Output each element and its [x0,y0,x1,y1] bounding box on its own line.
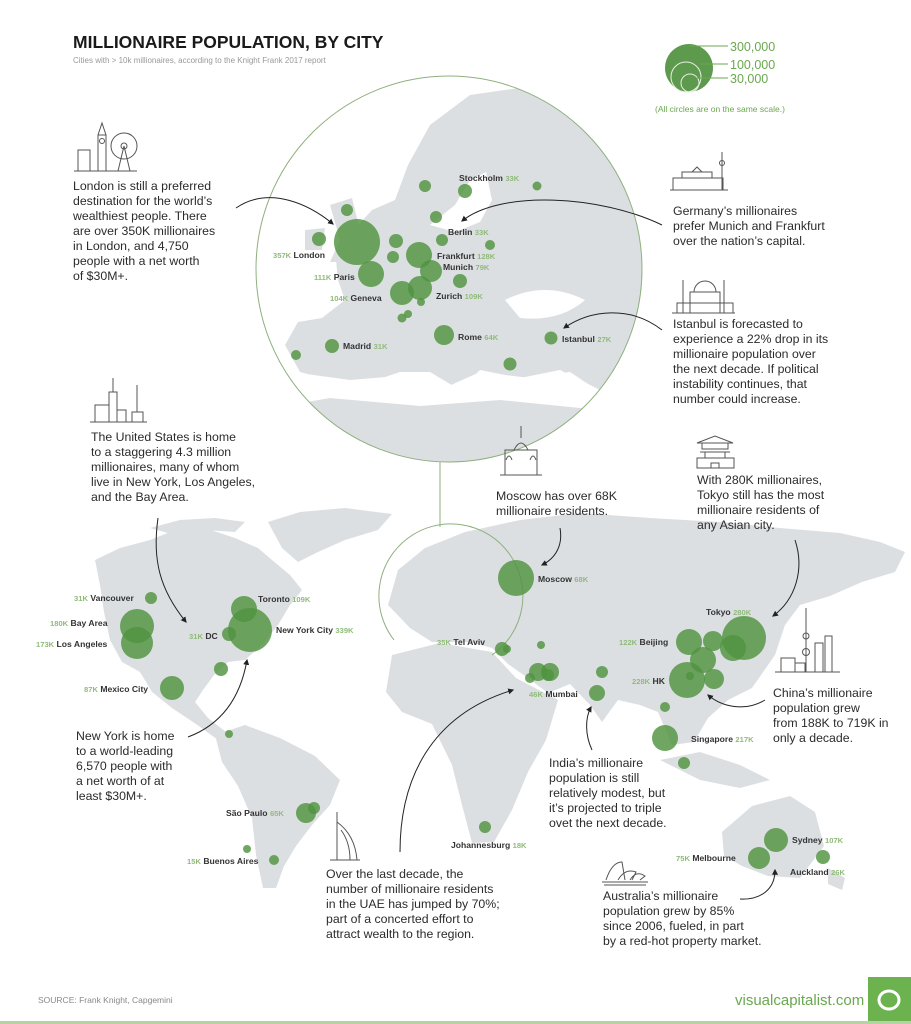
legend: 100,000 [730,58,775,72]
text: australia: population grew by 85% [603,904,734,918]
europe labels: Frankfurt 128K [437,251,496,261]
europe labels: Istanbul 27K [562,334,612,344]
text: london: people with a net worth [73,254,200,268]
icon: moscow [500,426,542,475]
world labels: Auckland 26K [790,867,846,877]
icon: new york [90,378,147,422]
europe labels: Munich 79K [443,262,490,272]
icon: berlin [670,152,728,190]
world labels: 75K Melbourne [676,853,736,863]
world bubbles [120,560,830,869]
europe bubbles [291,180,558,370]
text: australia: Australia’s millionaire [603,889,718,903]
connector line to moscow circle [439,462,441,527]
text: new york: a net worth of at [76,774,165,788]
world labels: Moscow 68K [538,574,589,584]
text: london: of $30M+. [73,269,128,283]
text: new york: least $30M+. [76,789,147,803]
legend: (All circles are on the same scale.) [655,104,785,114]
text: australia: by a red-hot property market. [603,934,762,948]
world labels: Sydney 107K [792,835,844,845]
text: india: it’s projected to triple [549,801,662,815]
icon: burj al arab [330,812,360,860]
icon: sydney opera [602,862,648,885]
text: india: population is still [549,771,639,785]
footer: SOURCE: Frank Knight, Capgemini [38,995,173,1005]
text: united states: millionaires, many of whom [91,460,239,474]
world labels: 173K Los Angeles [36,639,108,649]
text: istanbul: experience a 22% drop in its [673,332,828,346]
text: tokyo: millionaire residents of [697,503,820,517]
text: tokyo: Tokyo still has the most [697,488,825,502]
footer [0,977,911,1024]
world labels: Johannesburg 18K [451,840,527,850]
world labels: 46K Mumbai [529,689,578,699]
legend [655,40,785,114]
legend: 300,000 [730,40,775,54]
text: germany: Germany’s millionaires [673,204,797,218]
text: uae: number of millionaire residents [326,882,493,896]
text: india: relatively modest, but [549,786,666,800]
europe labels: 104K Geneva [330,293,382,303]
text: istanbul: Istanbul is forecasted to [673,317,803,331]
text: tokyo: With 280K millionaires, [697,473,822,487]
europe labels: Zurich 109K [436,291,483,301]
text: london: are over 350K millionaires [73,224,215,238]
legend: 30,000 [730,72,768,86]
text: united states: and the Bay Area. [91,490,189,504]
world labels: São Paulo 65K [226,808,284,818]
world labels: 35K Tel Aviv [437,637,485,647]
text: tokyo: any Asian city. [697,518,775,532]
europe labels [273,173,612,351]
text: australia: since 2006, fueled, in part [603,919,744,933]
europe labels: Madrid 31K [343,341,388,351]
world map land [95,508,905,890]
world labels: 15K Buenos Aires [187,856,259,866]
world labels: 180K Bay Area [50,618,108,628]
text: istanbul: millionaire population over [673,347,816,361]
icon: london [74,123,137,171]
icon: shanghai [775,608,840,672]
europe labels: Stockholm 33K [459,173,520,183]
text: istanbul: instability continues, that [673,377,808,391]
icon: istanbul mosque [672,280,735,313]
world labels [36,574,846,877]
world labels: 87K Mexico City [84,684,148,694]
text: china: population grew [773,701,860,715]
text: london: in London, and 4,750 [73,239,189,253]
text: china: from 188K to 719K in [773,716,889,730]
text: moscow: millionaire residents. [496,504,608,518]
arrows [156,198,799,899]
title: MILLIONAIRE POPULATION, BY CITY [73,32,384,52]
europe inset circle [256,76,642,462]
europe labels: Rome 64K [458,332,499,342]
text: london: destination for the world’s [73,194,212,208]
moscow inset circle [379,524,523,655]
text: uae: part of a concerted effort to [326,912,474,926]
world labels: Toronto 109K [258,594,311,604]
text: new york: to a world-leading [76,744,173,758]
text: new york: New York is home [76,729,174,743]
europe labels: Berlin 33K [448,227,489,237]
footer: visualcapitalist.com [735,992,864,1009]
world labels: 31K DC [189,631,218,641]
text: germany: prefer Munich and Frankfurt [673,219,825,233]
text: india: India’s millionaire [549,756,643,770]
world labels: 122K Beijing [619,637,668,647]
text: uae: attract wealth to the region. [326,927,474,941]
europe labels: 357K London [273,250,325,260]
text: germany: over the nation’s capital. [673,234,805,248]
europe labels: 111K Paris [314,272,355,282]
text: india: ovet the next decade. [549,816,667,830]
text: china: only a decade. [773,731,853,745]
world labels: 31K Vancouver [74,593,134,603]
text: united states: The United States is home [91,430,236,444]
text: new york: 6,570 people with [76,759,173,773]
text: uae: Over the last decade, the [326,867,463,881]
world labels: Singapore 217K [691,734,754,744]
icon: tokyo [697,436,734,468]
text: moscow: Moscow has over 68K [496,489,617,503]
text: uae: in the UAE has jumped by 70%; [326,897,500,911]
world labels: 228K HK [632,676,666,686]
text: istanbul: number could increase. [673,392,801,406]
text: london: wealthiest people. There [72,209,207,223]
text: united states: to a staggering 4.3 million [91,445,231,459]
text: istanbul: the next decade. If political [673,362,819,376]
text: china: China’s millionaire [773,686,873,700]
world labels: New York City 339K [276,625,354,635]
subtitle: Cities with > 10k millionaires, according to the Knight Frank 2017 report [73,56,327,65]
world labels: Tokyo 280K [706,607,752,617]
text: united states: live in New York, Los Angeles, [91,475,255,489]
text: london: London is still a preferred [73,179,211,193]
